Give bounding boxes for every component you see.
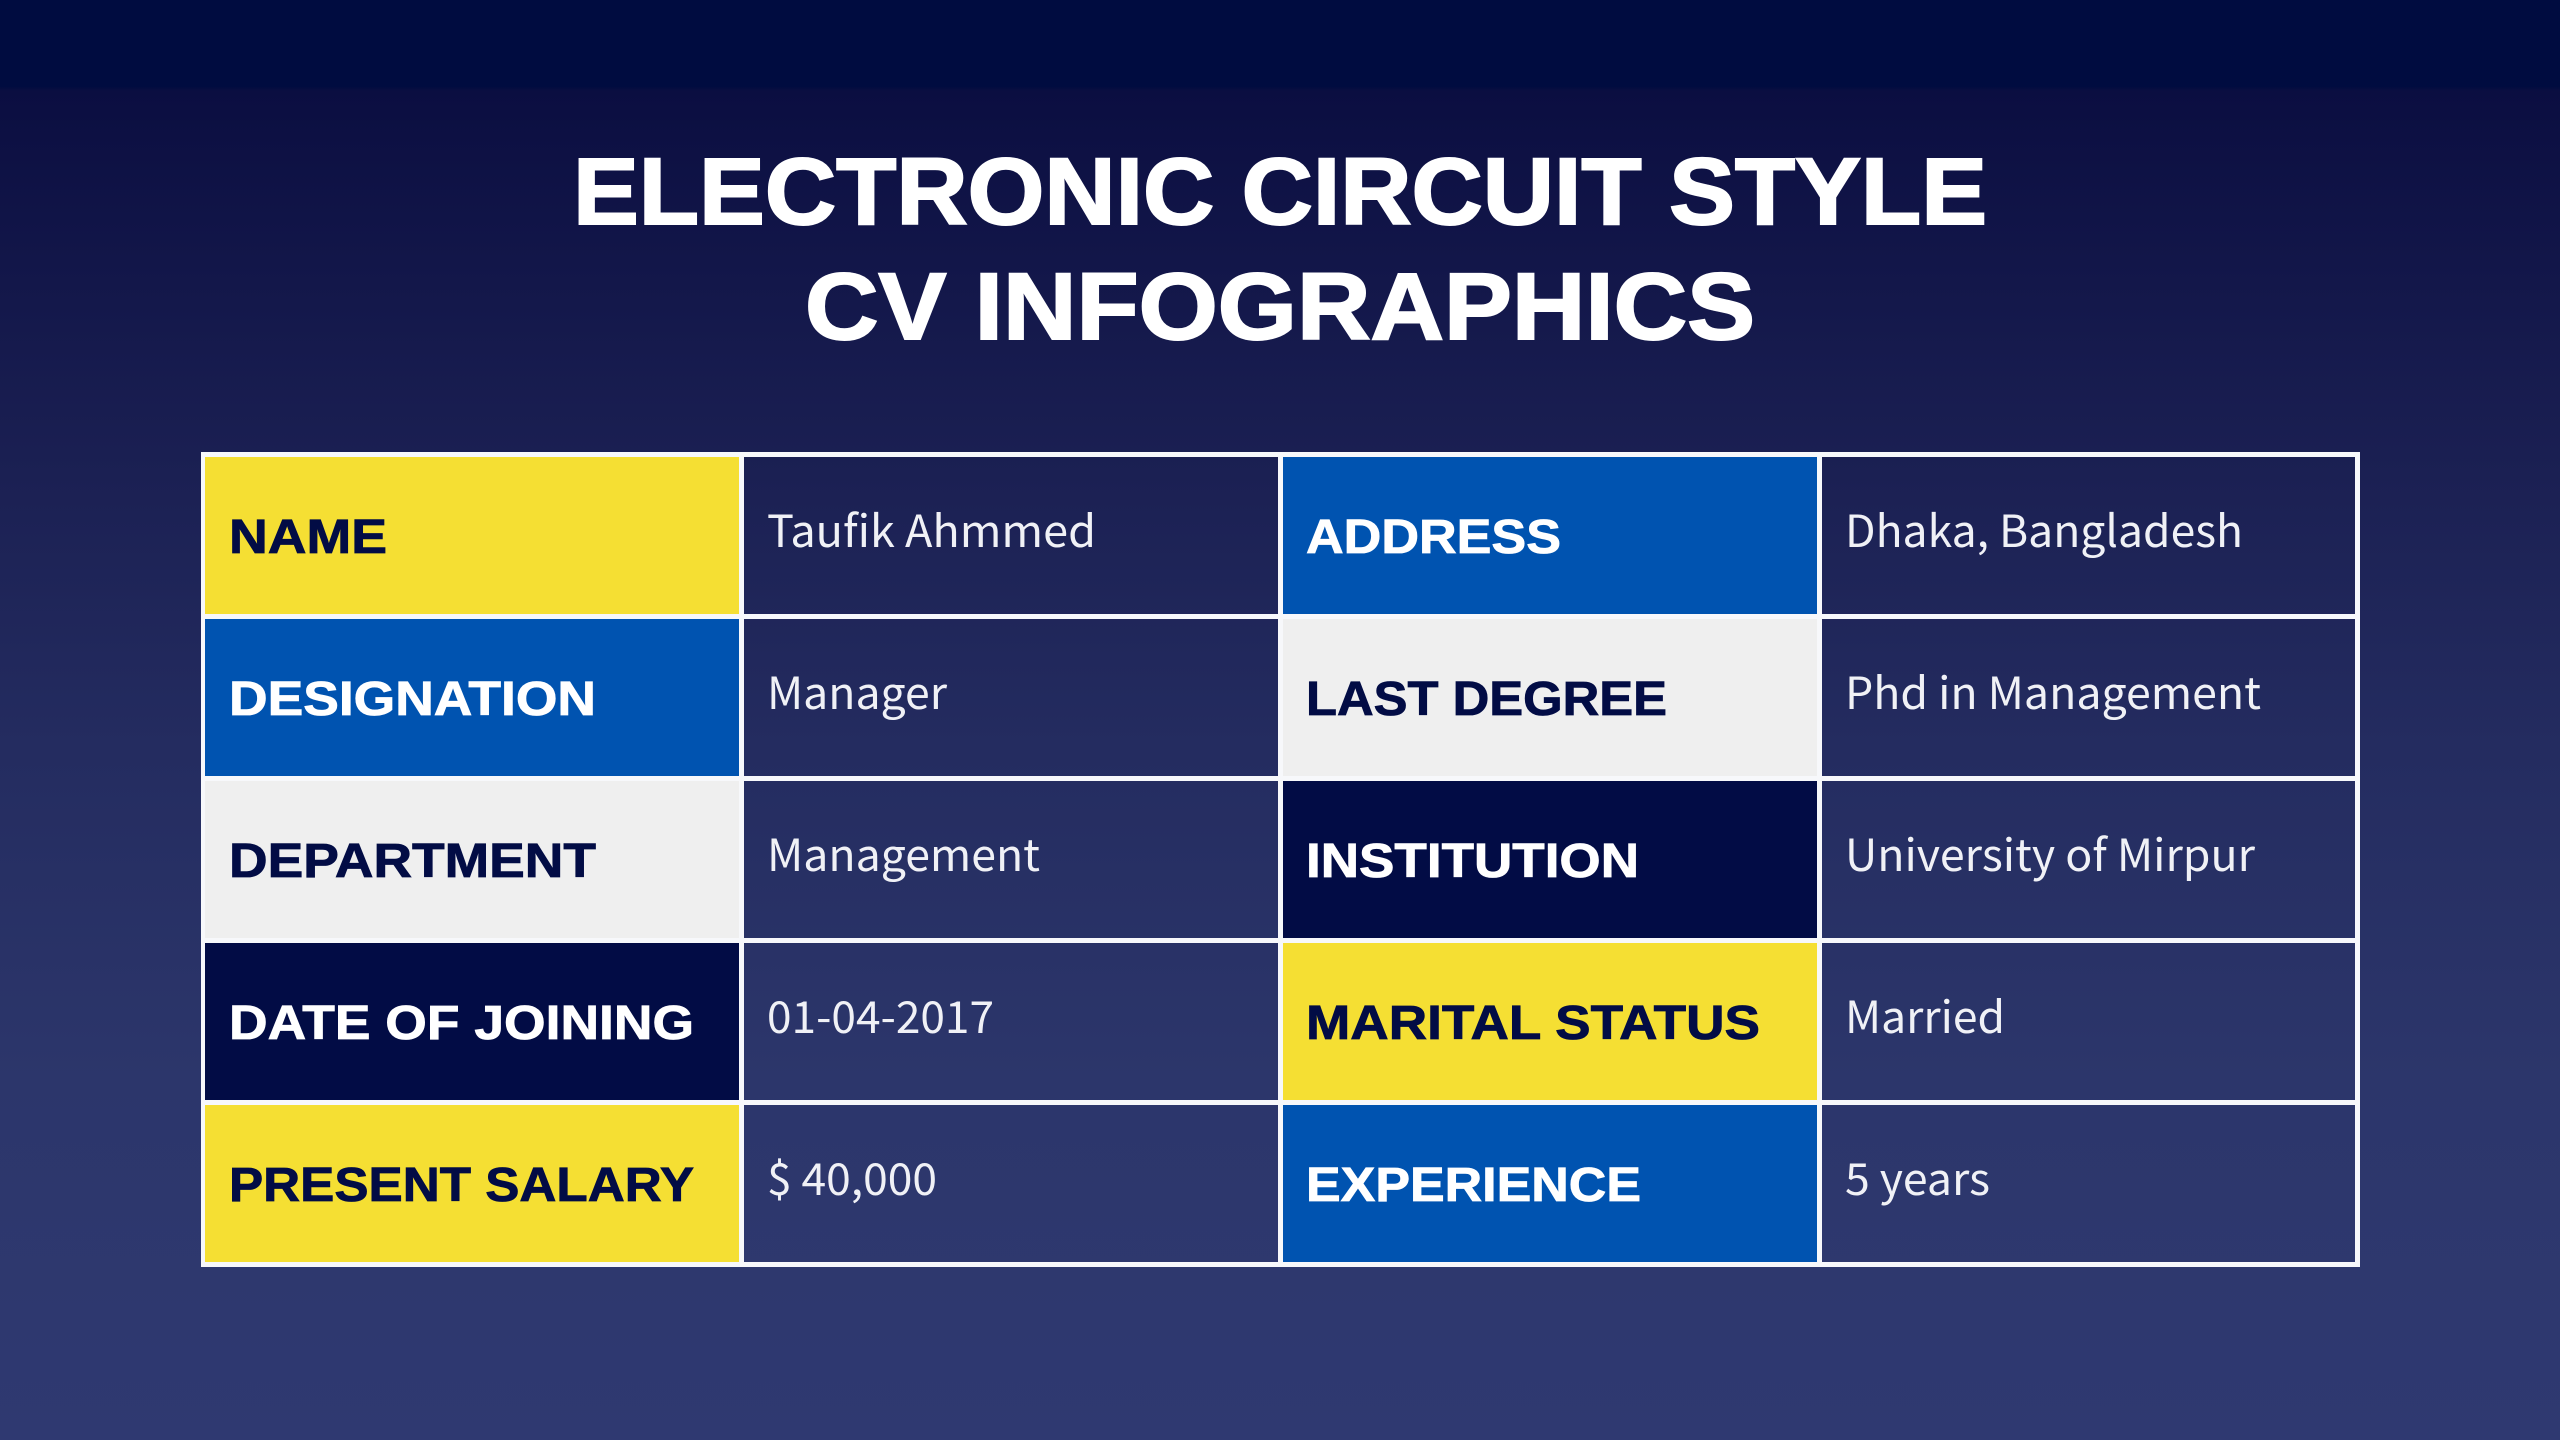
- value: last degree: [1820, 616, 2359, 778]
- value: marital status: [1820, 940, 2359, 1102]
- label: institution: [1281, 778, 1820, 940]
- value: designation: [742, 616, 1281, 778]
- label: last degree: [1281, 616, 1820, 778]
- value: address: [1820, 454, 2359, 616]
- label: experience: EXPERIENCE: [1306, 1159, 1641, 1212]
- value: experience: 5 years: [1845, 1144, 1990, 1208]
- label: address: ADDRESS: [1306, 511, 1561, 564]
- value: department: [742, 778, 1281, 940]
- label: experience: [1281, 1102, 1820, 1264]
- value: date of joining: 01-04-2017: [767, 982, 994, 1046]
- value: marital status: Married: [1845, 982, 2005, 1046]
- value: institution: University of Mirpur: [1845, 820, 2256, 884]
- title: [573, 139, 1987, 360]
- value: experience: [1820, 1102, 2359, 1264]
- label: name: [203, 454, 742, 616]
- value: date of joining: [742, 940, 1281, 1102]
- label: date of joining: [203, 940, 742, 1102]
- value: institution: [1820, 778, 2359, 940]
- label: last degree: LAST DEGREE: [1306, 673, 1667, 726]
- label: marital status: [1281, 940, 1820, 1102]
- label: institution: INSTITUTION: [1306, 835, 1639, 888]
- label: department: [203, 778, 742, 940]
- value: present salary: [742, 1102, 1281, 1264]
- value: name: [742, 454, 1281, 616]
- label: marital status: MARITAL STATUS: [1306, 997, 1760, 1050]
- label: date of joining: DATE OF JOINING: [229, 997, 694, 1050]
- value: address: Dhaka, Bangladesh: [1845, 496, 2243, 560]
- title: ELECTRONIC CIRCUIT STYLE: [573, 139, 1987, 245]
- table: CV details: [201, 452, 2360, 1267]
- value: present salary: $ 40,000: [767, 1144, 937, 1208]
- label: name: NAME: [229, 511, 387, 564]
- value: designation: Manager: [767, 658, 948, 722]
- label: present salary: PRESENT SALARY: [229, 1159, 694, 1212]
- label: department: DEPARTMENT: [229, 835, 596, 888]
- value: name: Taufik Ahmmed: [767, 496, 1096, 560]
- title: CV INFOGRAPHICS: [805, 254, 1755, 360]
- label: address: [1281, 454, 1820, 616]
- value: last degree: Phd in Management: [1845, 658, 2261, 722]
- label: present salary: [203, 1102, 742, 1264]
- value: department: Management: [767, 820, 1040, 884]
- label: designation: DESIGNATION: [229, 673, 596, 726]
- label: designation: [203, 616, 742, 778]
